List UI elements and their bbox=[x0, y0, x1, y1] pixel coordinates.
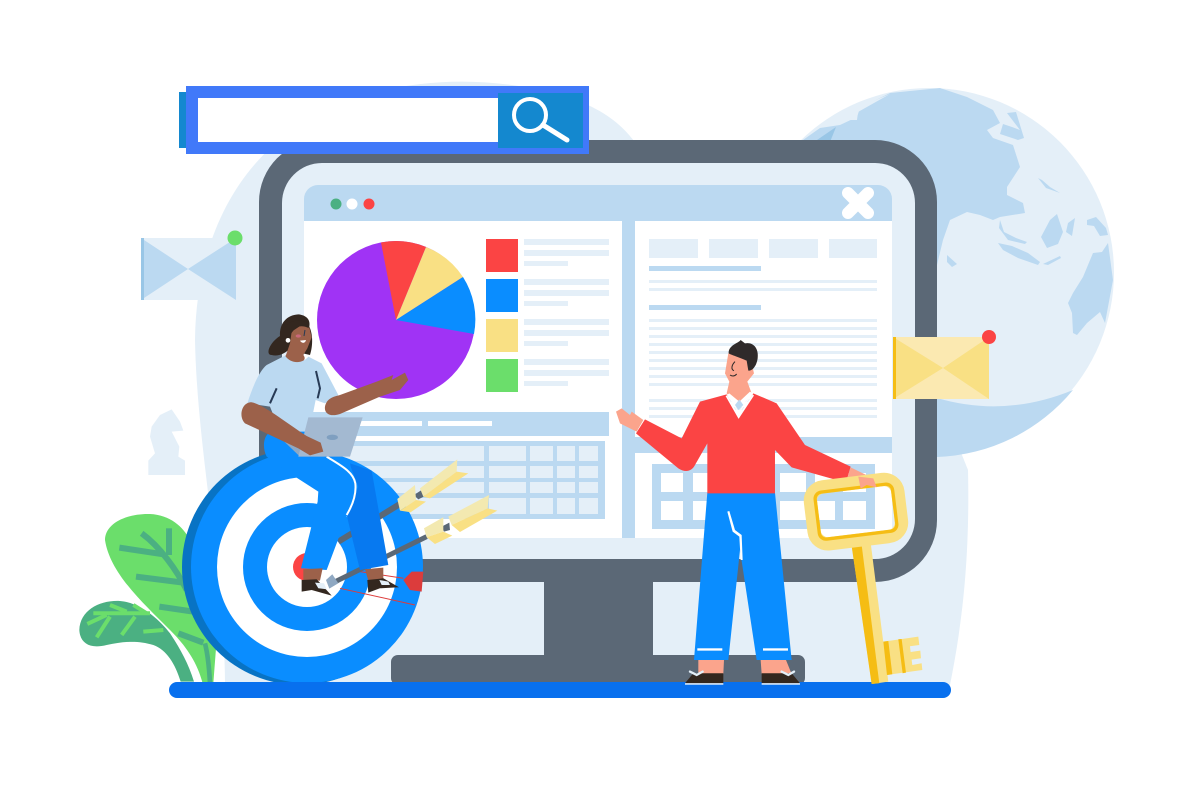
hands bbox=[616, 408, 877, 488]
magnifier icon bbox=[514, 99, 567, 140]
pane divider bbox=[622, 221, 635, 538]
key shaft bbox=[852, 543, 888, 684]
monitor frame bbox=[259, 140, 937, 582]
hair bbox=[729, 340, 758, 371]
hair bbox=[268, 314, 312, 355]
laptop bbox=[283, 417, 363, 457]
right pane bbox=[635, 221, 892, 538]
target edge marker bbox=[340, 572, 423, 605]
face and neck bbox=[285, 325, 312, 363]
pie chart bbox=[317, 241, 475, 399]
arrows bbox=[326, 459, 497, 589]
plant bbox=[79, 514, 217, 683]
search bar bbox=[179, 86, 589, 154]
ground bar bbox=[169, 682, 951, 698]
window title bar bbox=[304, 185, 892, 225]
lower arrow bbox=[326, 495, 497, 589]
monitor bbox=[259, 140, 937, 685]
monitor screen bbox=[282, 163, 915, 559]
shirt bbox=[247, 356, 338, 432]
facial features bbox=[730, 362, 737, 376]
sweater bbox=[636, 393, 851, 493]
key head bbox=[809, 478, 903, 545]
key bbox=[809, 477, 922, 684]
ankles bbox=[698, 660, 792, 674]
left pane bbox=[304, 221, 622, 538]
chess knight icon bbox=[148, 409, 185, 475]
left envelope bbox=[141, 230, 242, 300]
earring bbox=[286, 338, 290, 343]
collar bbox=[727, 392, 753, 410]
trousers bbox=[694, 493, 792, 660]
man bbox=[616, 340, 877, 685]
globe bbox=[745, 88, 1114, 457]
legs and trousers bbox=[264, 431, 399, 596]
left data table bbox=[304, 412, 609, 519]
background blob bbox=[195, 82, 968, 685]
right data table bbox=[635, 437, 892, 529]
right document text bbox=[649, 239, 877, 418]
upper arrow bbox=[338, 459, 468, 542]
monitor base bbox=[391, 655, 805, 685]
legend bbox=[486, 239, 609, 392]
facial details bbox=[285, 321, 309, 343]
close icon bbox=[848, 193, 868, 213]
monitor stand bbox=[544, 575, 653, 660]
window dots bbox=[330, 198, 374, 210]
target bbox=[182, 449, 423, 685]
arms bbox=[241, 373, 408, 455]
shoes bbox=[685, 672, 800, 685]
fingers on key bbox=[858, 477, 877, 489]
woman with laptop bbox=[241, 314, 408, 596]
right envelope bbox=[893, 330, 996, 399]
neck and face bbox=[725, 353, 754, 408]
key teeth bbox=[883, 637, 922, 675]
